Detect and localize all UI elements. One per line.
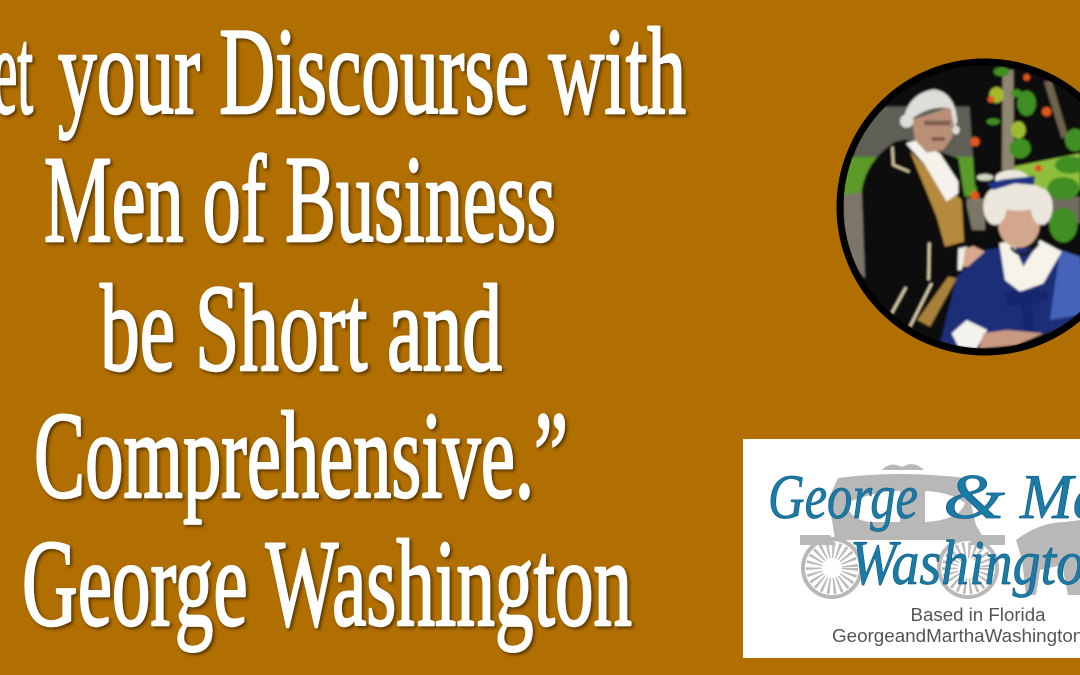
sleeve cuff <box>952 320 987 348</box>
dark tree trunk <box>968 75 1000 188</box>
carriage window <box>846 491 965 522</box>
collar <box>999 240 1062 292</box>
logo card <box>743 439 1080 658</box>
logo script name line 1 <box>768 461 1080 532</box>
wooden post <box>1002 70 1014 170</box>
coat trim <box>892 147 909 172</box>
George figure <box>862 89 975 340</box>
log wall <box>853 107 973 157</box>
quote line 3: be Short and <box>100 260 502 397</box>
attribution: George Washington <box>22 515 632 652</box>
bonnet ribbon <box>987 176 1035 190</box>
bow <box>1007 290 1046 331</box>
logo script name line 1: George <box>768 461 918 532</box>
quote line 4: Comprehensive.” <box>34 387 568 524</box>
face <box>998 202 1040 248</box>
dress <box>940 247 1080 348</box>
coat sleeve cuff <box>958 247 967 270</box>
quote line 1 <box>0 3 686 140</box>
quote text <box>0 3 686 652</box>
coat <box>860 138 974 310</box>
hair <box>983 170 1053 225</box>
foliage <box>977 67 1080 242</box>
hand on shoulder <box>963 246 990 267</box>
photo backdrop <box>840 63 1080 350</box>
logo script name line 1: & <box>943 461 1005 532</box>
carriage silhouette <box>800 464 1080 595</box>
logo location text: Based in Florida <box>910 605 1047 625</box>
flowers <box>970 74 1051 200</box>
photo border <box>840 62 1080 352</box>
carriage wheels <box>803 539 997 597</box>
lawn <box>840 157 977 197</box>
fence <box>843 192 867 280</box>
wig <box>900 89 960 134</box>
quote line 2: Men of Business <box>44 131 556 268</box>
Martha figure <box>940 170 1080 348</box>
quote line 1: your Discourse with <box>58 3 686 140</box>
circular photo <box>840 62 1080 352</box>
hands <box>979 330 1043 348</box>
face <box>912 107 953 153</box>
cravat <box>906 140 958 202</box>
waistcoat <box>910 152 964 247</box>
logo background <box>743 439 1080 658</box>
necklace <box>1011 243 1038 254</box>
